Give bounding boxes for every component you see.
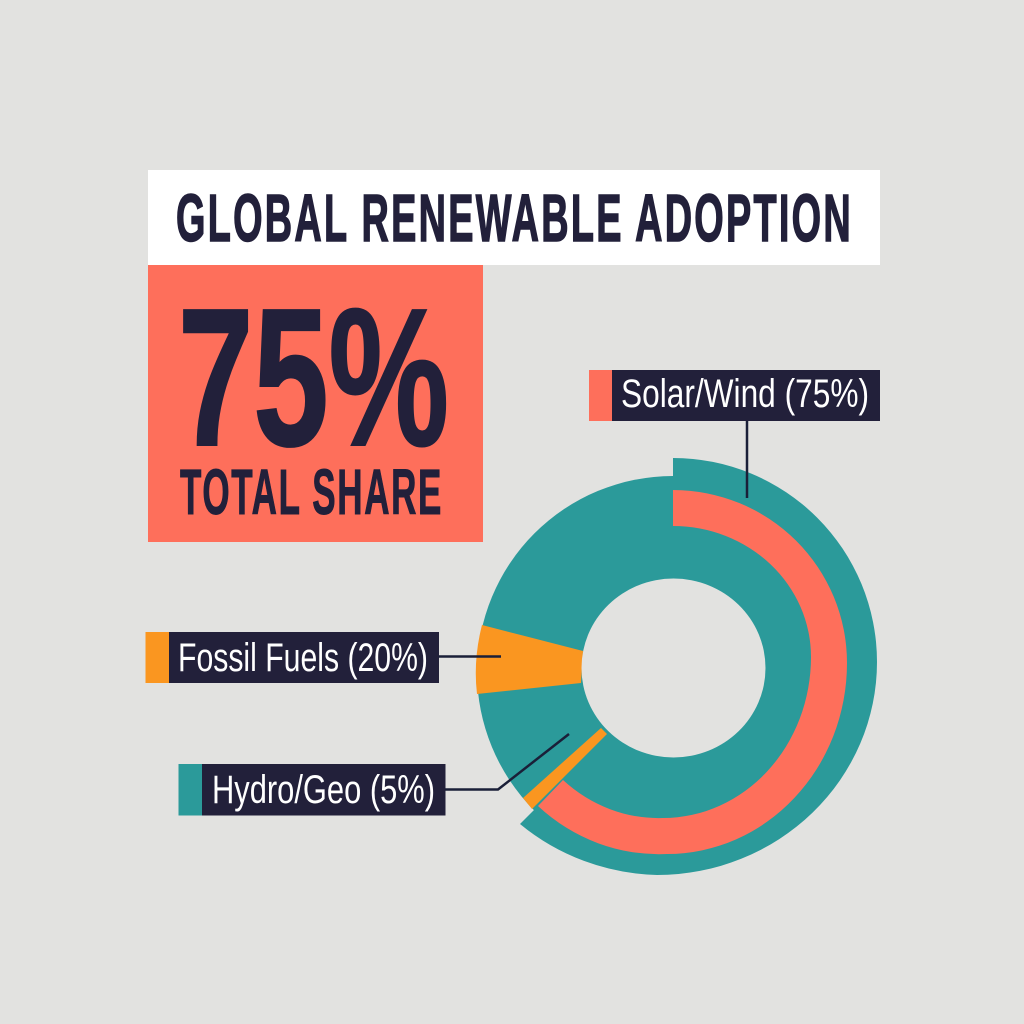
leader line: fossil fuels xyxy=(439,655,501,658)
title banner xyxy=(148,170,880,265)
panel: total share stat xyxy=(148,265,483,542)
legend label: hydro/geo: Hydro/Geo (5%) xyxy=(212,768,435,812)
big number 75%: 75% xyxy=(178,268,449,487)
main teal ring xyxy=(477,476,869,868)
legend label: solar/wind xyxy=(589,370,880,421)
legend label: fossil fuels xyxy=(146,632,439,683)
leader line: hydro/geo xyxy=(445,734,569,790)
centre hole xyxy=(582,578,766,758)
leader line: solar/wind xyxy=(746,421,748,498)
hydro/geo orange sliver xyxy=(523,728,607,809)
donut chart xyxy=(476,458,877,875)
total share caption: TOTAL SHARE xyxy=(180,456,443,528)
legend label: fossil fuels: Fossil Fuels (20%) xyxy=(178,636,428,680)
legend label: solar/wind: Solar/Wind (75%) xyxy=(621,372,869,416)
solar/wind coral arc xyxy=(538,490,847,854)
solar/wind outer teal arc xyxy=(520,458,877,875)
legend label: hydro/geo xyxy=(178,764,446,816)
fossil fuels orange wedge xyxy=(476,625,583,694)
